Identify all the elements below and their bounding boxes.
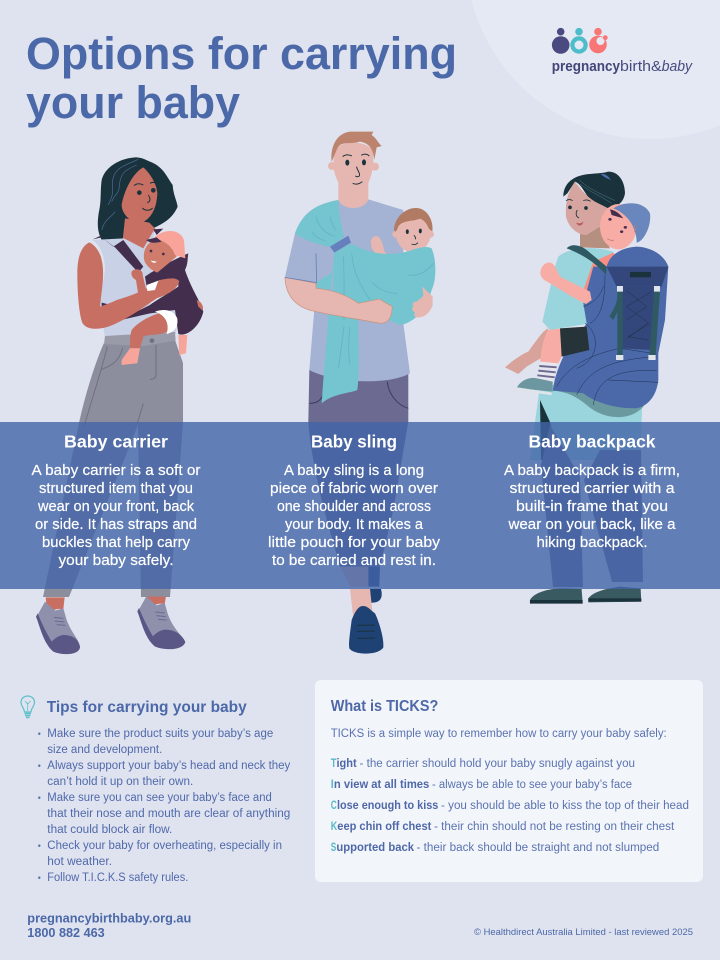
K line: - their chin should not be resting on their chest — [434, 821, 675, 833]
panel heading: What is TICKS? — [331, 698, 438, 715]
tips list: that their nose and mouth are clear of anything — [47, 808, 290, 820]
lacing — [627, 291, 652, 340]
tips list: size and development. — [47, 744, 162, 756]
straps — [567, 245, 607, 275]
I line: n view at all times — [334, 779, 429, 791]
panel: what is TICKS — [315, 680, 703, 882]
option: baby backpack: wear on your back, like a — [507, 517, 676, 533]
logo: pregnancybirth&baby: baby — [662, 58, 693, 75]
I line: I — [331, 779, 334, 791]
shoes — [349, 589, 383, 654]
option: baby backpack — [504, 432, 680, 551]
logo: pregnancybirth&baby — [552, 28, 693, 75]
tips list: can’t hold it up on their own. — [47, 776, 193, 788]
S line: S — [331, 842, 336, 854]
C line — [331, 800, 689, 812]
option: baby sling: piece of fabric worn over — [270, 481, 438, 497]
sling ring — [330, 236, 351, 253]
title: Options for carrying — [26, 28, 457, 79]
backpack seams — [557, 275, 658, 405]
I line — [331, 779, 632, 791]
intro text: TICKS is a simple way to remember how to carry your baby safely: — [331, 728, 667, 740]
option: baby backpack: structured carrier with a — [510, 481, 675, 497]
neck — [580, 227, 610, 248]
option: baby carrier: Baby carrier — [64, 432, 168, 452]
K line: K — [331, 821, 338, 833]
baby shoe — [517, 378, 553, 392]
option: baby carrier: or side. It has straps and — [35, 517, 197, 533]
belt — [104, 332, 176, 346]
baby sock — [537, 362, 557, 382]
backpack shadow — [553, 387, 650, 417]
baby — [392, 231, 399, 238]
T line: ight — [336, 758, 357, 770]
baby arm — [540, 263, 592, 304]
vest top — [92, 230, 177, 337]
C line: C — [331, 800, 337, 812]
copyright: © Healthdirect Australia Limited - last reviewed 2025 — [474, 927, 693, 937]
T line: - the carrier should hold your baby snugly against you — [360, 758, 635, 770]
shoes — [36, 596, 185, 654]
neck — [123, 218, 156, 249]
option: baby carrier: buckles that help carry — [42, 535, 191, 551]
tips heading: Tips for carrying your baby — [47, 699, 247, 716]
option: baby sling: to be carried and rest in. — [272, 553, 436, 569]
hand — [412, 287, 433, 317]
face — [122, 167, 157, 223]
face — [566, 182, 608, 235]
baby socks — [122, 335, 187, 365]
option: baby carrier: your baby safely. — [58, 553, 174, 569]
arm — [285, 277, 392, 323]
teal top — [542, 248, 613, 330]
backpack — [553, 247, 668, 408]
contact details: 1800 882 463 — [27, 925, 105, 940]
sling tail and pouch — [316, 243, 435, 403]
C line: - you should be able to kiss the top of their head — [441, 800, 689, 812]
trousers — [308, 370, 408, 587]
figure: woman with baby backpack — [505, 172, 668, 604]
option: baby carrier: structured item that you — [39, 481, 193, 497]
tips list: Follow T.I.C.K.S safety rules. — [47, 872, 188, 884]
title — [26, 28, 457, 128]
K line — [331, 821, 675, 833]
title: your baby — [26, 77, 240, 128]
bullets — [38, 732, 40, 879]
baby head and hat — [144, 239, 177, 273]
option: baby sling — [268, 432, 441, 569]
option: baby sling: little pouch for your baby — [268, 535, 441, 551]
baby shirt — [583, 253, 620, 300]
shirt — [285, 199, 410, 381]
tips list: Always support your baby’s head and neck they — [47, 760, 291, 772]
logo: pregnancybirth&baby: pregnancy — [552, 58, 621, 75]
contact details — [27, 911, 191, 940]
tips list: hot weather. — [47, 856, 112, 868]
head and neck — [338, 180, 368, 208]
baby leg — [540, 328, 562, 363]
baby head — [600, 204, 637, 249]
band: option descriptions — [0, 422, 720, 589]
option: baby carrier — [32, 432, 201, 569]
figure: woman with baby carrier — [36, 157, 203, 654]
logo: pregnancybirth&baby: birth& — [620, 58, 662, 75]
contact details: pregnancybirthbaby.org.au — [27, 911, 191, 926]
baby leg — [130, 312, 170, 348]
tips list: Make sure you can see your baby’s face and — [47, 792, 272, 804]
C line: lose enough to kiss — [337, 800, 438, 812]
trousers — [43, 340, 183, 597]
option: baby backpack: hiking backpack. — [536, 535, 648, 551]
tips panel — [38, 699, 291, 884]
option: baby backpack: A baby backpack is a firm, — [504, 463, 680, 479]
hair — [563, 172, 625, 209]
carrier — [93, 229, 163, 273]
S line: upported back — [336, 842, 415, 854]
mother's hand — [505, 328, 548, 374]
hair — [98, 157, 178, 247]
option: baby sling: A baby sling is a long — [284, 463, 424, 479]
shoes — [530, 587, 641, 604]
option: baby carrier: wear on your front, back — [37, 499, 195, 515]
sling shoulder — [295, 200, 344, 247]
tips list — [47, 728, 291, 884]
option: baby sling: Baby sling — [311, 432, 397, 452]
option: baby carrier: A baby carrier is a soft or — [32, 463, 201, 479]
tips list: Make sure the product suits your baby’s age — [47, 728, 273, 740]
tips list: that could block air flow. — [47, 824, 172, 836]
baby hand — [131, 269, 147, 295]
tips list: Check your baby for overheating, especially in — [47, 840, 282, 852]
option: baby sling: your body. It makes a — [285, 517, 424, 533]
dress and trousers — [530, 385, 643, 460]
option: baby backpack: built-in frame that you — [516, 499, 668, 515]
K line: eep chin off chest — [337, 821, 431, 833]
T line: T — [331, 758, 336, 770]
option: baby sling: one shoulder and across — [277, 499, 431, 515]
S line: - their back should be straight and not slumped — [416, 842, 659, 854]
figure: man with baby sling — [285, 132, 435, 654]
I line: - always be able to see your baby’s face — [432, 779, 632, 791]
option: baby backpack: Baby backpack — [528, 432, 656, 452]
mother's arm — [77, 242, 179, 329]
icon: light bulb — [21, 696, 34, 718]
